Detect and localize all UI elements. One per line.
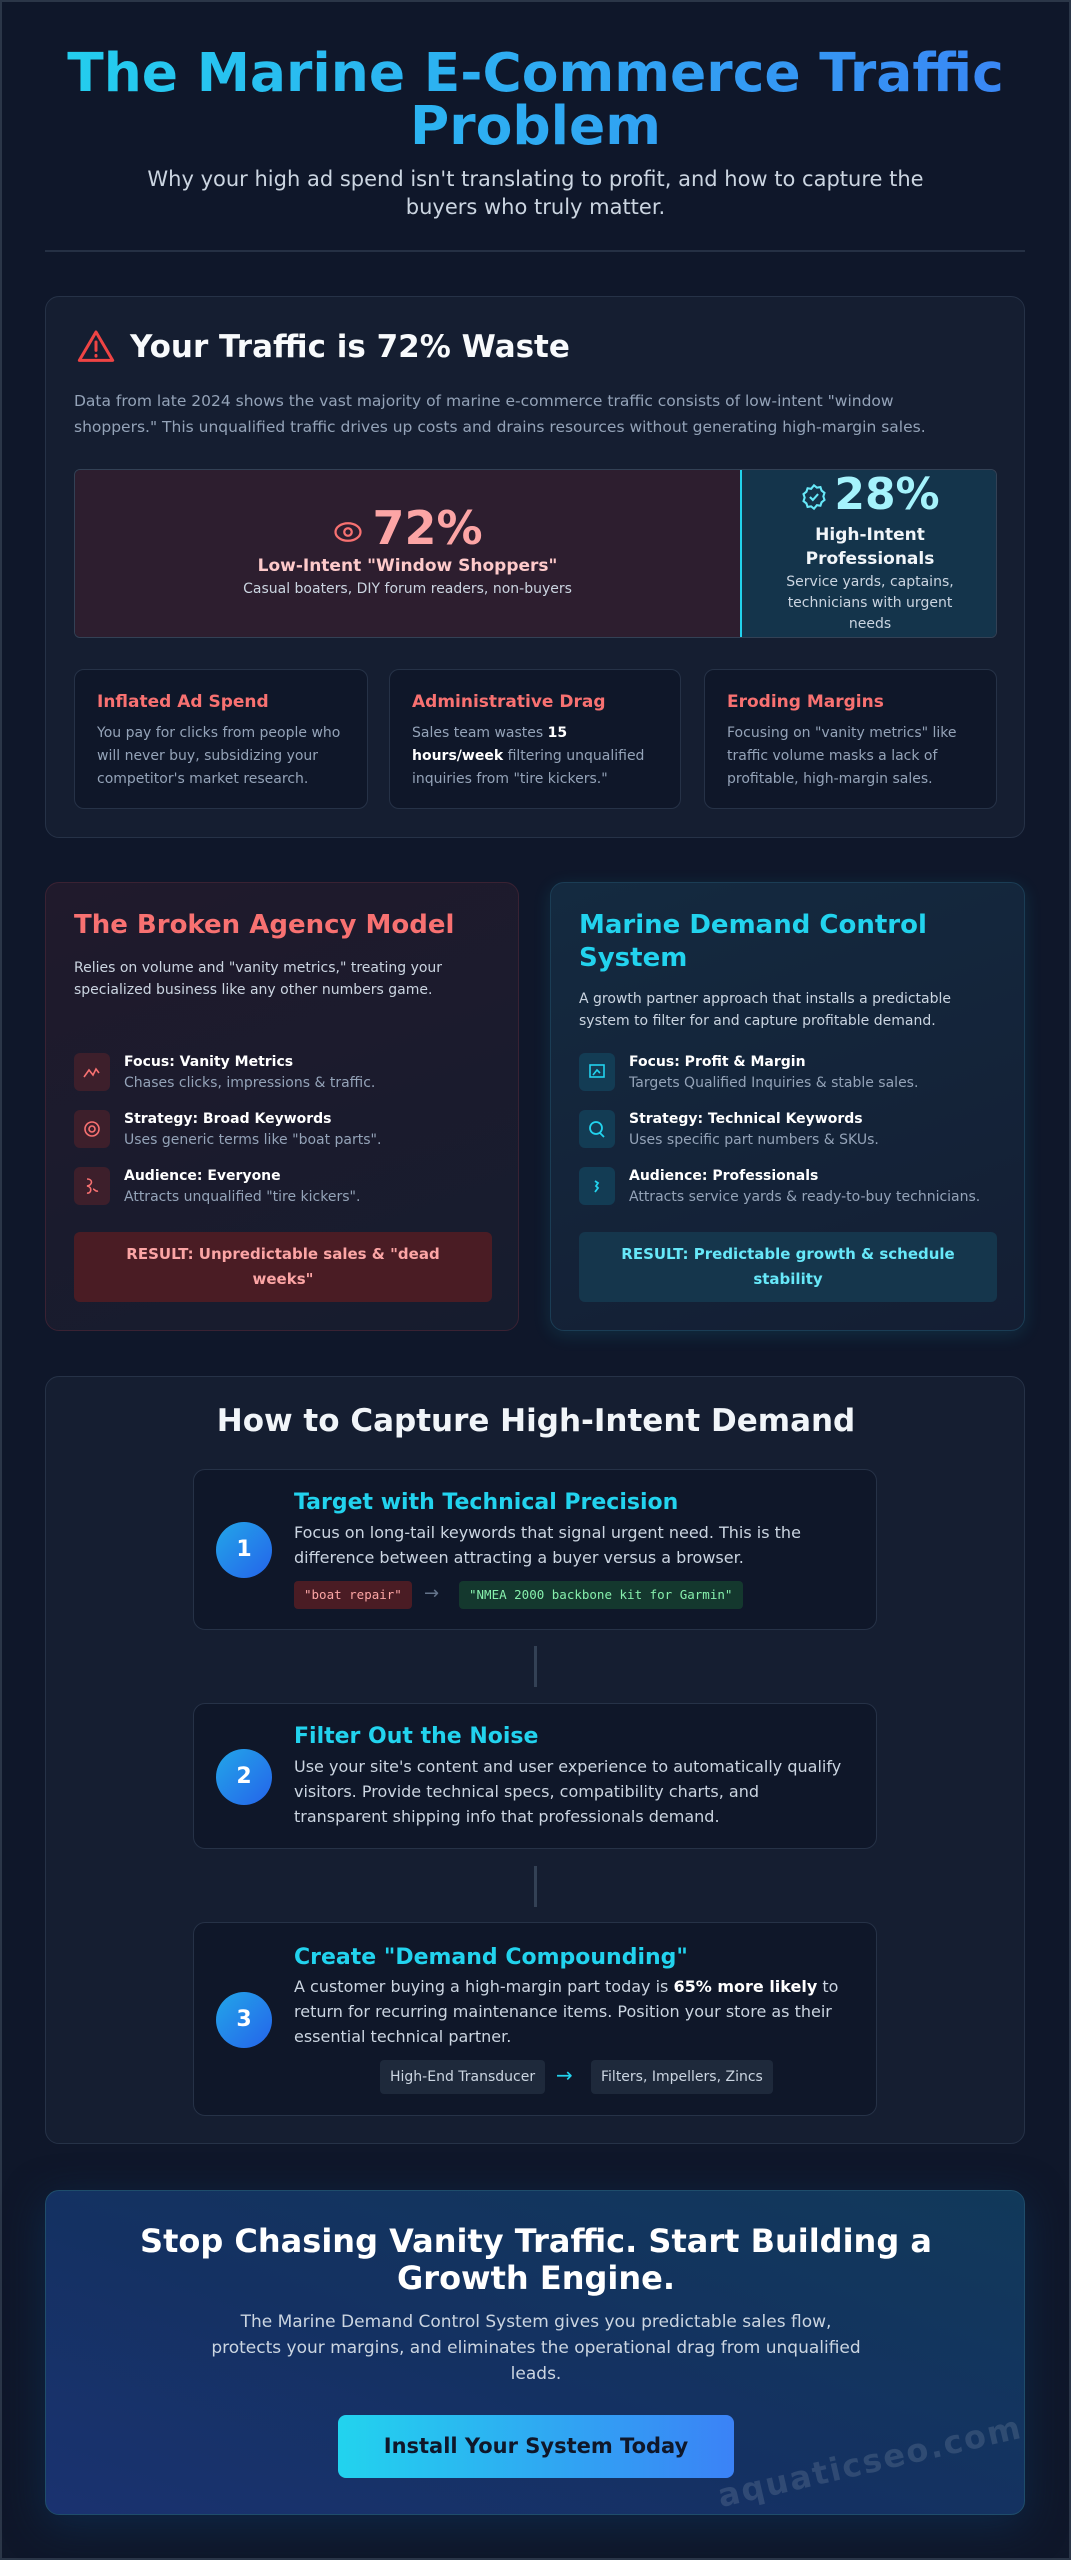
step 1: Target with Technical Precision [294,1490,678,1515]
step 2 [193,1703,877,1849]
result box: weeks" [253,1270,313,1288]
stat: 28% high intent: High-Intent [815,525,925,545]
step 3: Create "Demand Compounding" [294,1945,688,1970]
item: broad keywords: Strategy: Broad Keywords [124,1111,332,1127]
item: profit [579,1053,918,1091]
card: inflated ad spend: Inflated Ad Spend [97,692,269,712]
step 2: Use your site's content and user experience to automatically qualify visitors. Provide technical specs, compatibility charts, and transparent shipping info that professionals demand. [294,1757,841,1826]
product tags: High-End Transducer [390,2069,535,2085]
item: everyone [74,1167,360,1205]
title [0,46,1071,152]
product tags [380,2060,773,2094]
card: administrative drag: hours/week filtering unqualified [412,748,644,764]
item: broad keywords: Uses generic terms like "boat parts". [124,1132,381,1148]
item: vanity metrics [74,1053,375,1091]
keyword tags: "NMEA 2000 backbone kit for Garmin" [469,1587,732,1602]
description: leads. [511,2364,561,2384]
heading: Your Traffic is 72% Waste [130,329,570,365]
heading: Marine Demand Control System [579,910,927,973]
intro text: Data from late 2024 shows the vast majority of marine e-commerce traffic consists of low-intent "window shoppers." This unqualified traffic drives up costs and drains resources without generating high-margin sales. [74,392,926,436]
product tags: Filters, Impellers, Zincs [601,2069,763,2085]
card: administrative drag [389,669,681,809]
item: profit: Focus: Profit & Margin [629,1054,806,1070]
item: technical keywords: Strategy: Technical Keywords [629,1111,863,1127]
item: technical keywords: Uses specific part numbers & SKUs. [629,1132,879,1148]
button: Install Your System Today [384,2434,688,2458]
stat: 72% low intent: Casual boaters, DIY forum readers, non-buyers [243,581,572,597]
stat: 28% high intent [740,470,998,639]
item: vanity metrics: Chases clicks, impressions & traffic. [124,1075,375,1091]
step 3: A customer buying a high-margin part today is 65% more likely to return for recurring maintenance items. Position your store as their essential technical partner. [294,1977,838,2046]
item: professionals [579,1167,980,1205]
title: The Marine E-Commerce Traffic [67,41,1004,104]
item: everyone: Attracts unqualified "tire kickers". [124,1189,360,1205]
panel: broken agency model [45,882,519,1331]
stat: 28% high intent: Service yards, captains, technicians with urgent needs [786,574,954,632]
item: everyone: Audience: Everyone [124,1168,281,1184]
stat: 72% low intent [75,470,740,639]
card: administrative drag: Sales team wastes 15 [412,725,567,741]
description [211,2312,861,2384]
card: administrative drag: inquiries from "tire kickers." [412,771,608,787]
panel: marine demand control system [550,882,1025,1331]
keyword tags: "boat repair" [304,1587,402,1602]
step 1 [193,1469,877,1630]
subtitle: Why your high ad spend isn't translating to profit, and how to capture the buyers who truly matter. [147,167,924,219]
step 1: Focus on long-tail keywords that signal urgent need. This is the difference between attracting a buyer versus a browser. [294,1523,801,1567]
step 2: 2 [236,1764,252,1789]
description: Relies on volume and "vanity metrics," treating your specialized business like any other numbers game. [74,960,442,998]
item: profit: Targets Qualified Inquiries & stable sales. [629,1075,918,1091]
watermark: aquaticseo.com [714,2408,1026,2515]
button [338,2415,734,2478]
item: professionals: Attracts service yards & ready-to-buy technicians. [629,1189,980,1205]
stat: 72% low intent: 72% [372,501,483,555]
result box: RESULT: Predictable growth & schedule [621,1245,955,1263]
card: eroding margins: Eroding Margins [727,692,884,712]
result box [579,1232,997,1302]
step 1: 1 [236,1537,252,1562]
product tags: → [556,2063,573,2087]
item: broad keywords [74,1110,381,1148]
result box [74,1232,492,1302]
stat: 72% low intent: Low-Intent "Window Shoppers" [258,556,557,576]
keyword tags: → [424,1583,439,1604]
item: vanity metrics: Focus: Vanity Metrics [124,1054,293,1070]
description: The Marine Demand Control System gives you predictable sales flow, [241,2312,831,2332]
card: inflated ad spend: You pay for clicks from people who will never buy, subsidizing your competitor's market research. [97,725,340,787]
item: technical keywords [579,1110,879,1148]
keyword tags [294,1581,743,1609]
stat: 28% high intent: Professionals [806,549,934,569]
stat: 28% high intent: 28% [834,469,940,520]
heading: Stop Chasing Vanity Traffic. Start Building a Growth Engine. [140,2222,932,2297]
description: protects your margins, and eliminates the operational drag from unqualified [211,2338,861,2358]
card: eroding margins: Focusing on "vanity metrics" like traffic volume masks a lack of profitable, high-margin sales. [727,725,957,787]
result box: stability [753,1270,823,1288]
description: A growth partner approach that installs a predictable system to filter for and capture profitable demand. [579,991,951,1029]
card: inflated ad spend [74,669,368,809]
panel: traffic waste [45,296,1025,838]
card: administrative drag: Administrative Drag [412,692,606,712]
heading: The Broken Agency Model [74,910,454,940]
heading: How to Capture High-Intent Demand [217,1403,855,1439]
panel: call to action [45,2190,1025,2515]
card: eroding margins [704,669,997,809]
icon: warning [78,330,114,362]
panel: how to capture [45,1376,1025,2144]
step 2: Filter Out the Noise [294,1724,538,1749]
step 3 [193,1922,877,2116]
step 3: 3 [236,2007,252,2032]
result box: RESULT: Unpredictable sales & "dead [126,1245,440,1263]
item: professionals: Audience: Professionals [629,1168,818,1184]
stat bar [74,469,997,638]
